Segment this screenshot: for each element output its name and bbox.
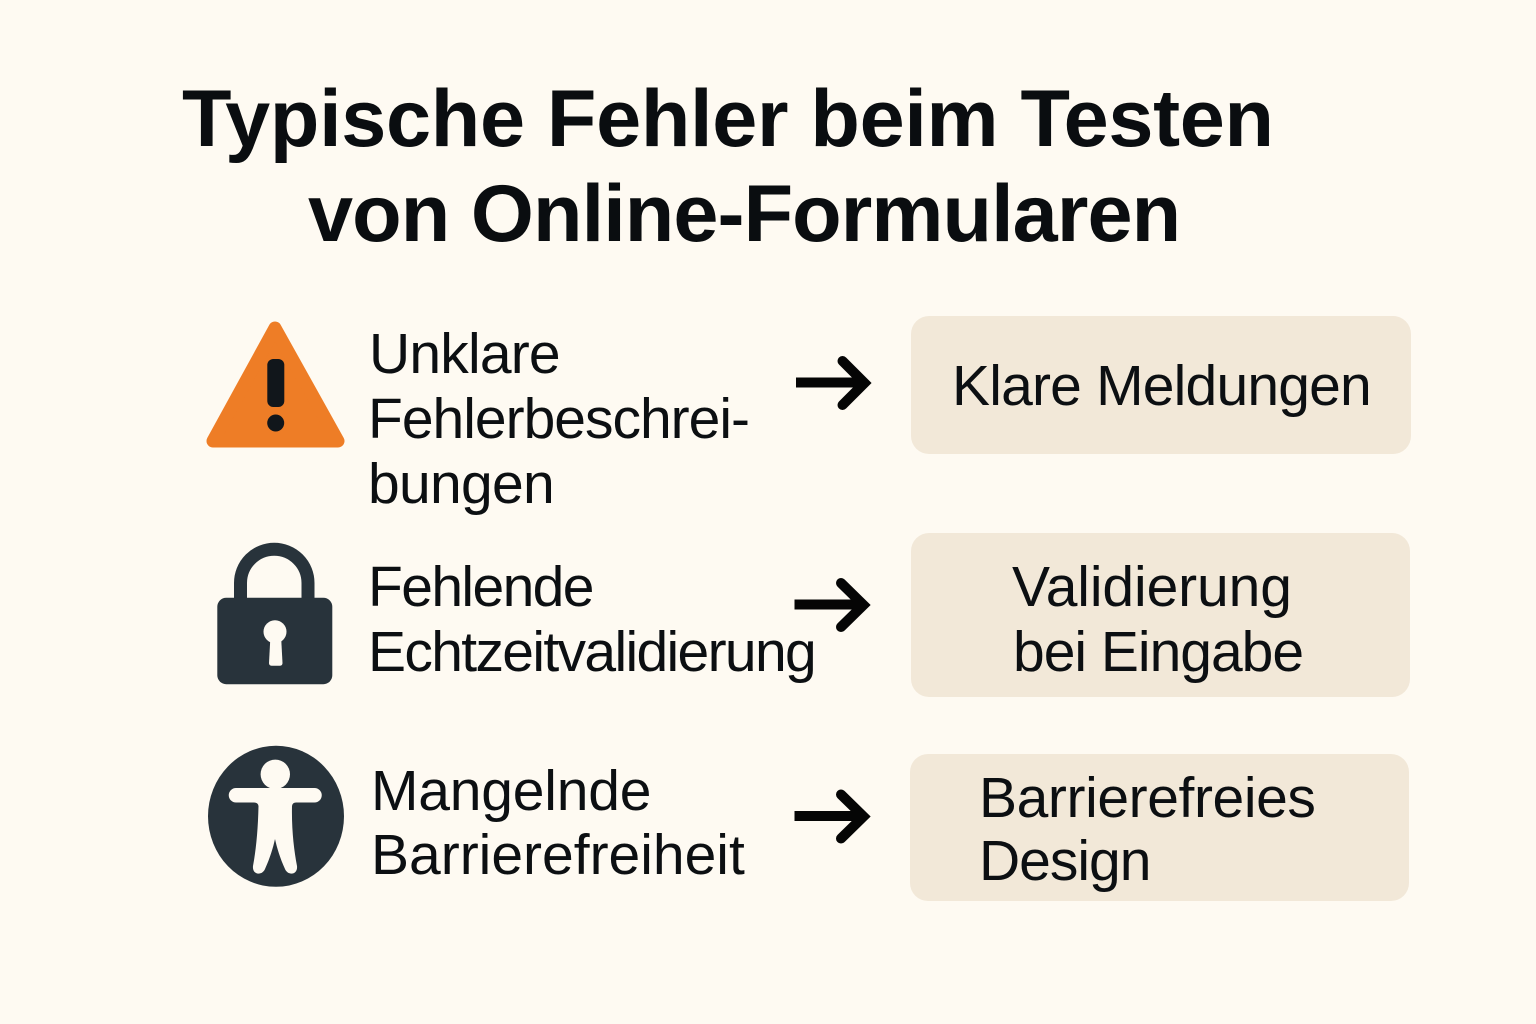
text: Mangelnde Barrierefreiheit: Barrierefreiheit (371, 823, 745, 887)
box: Barrierefreies Design: Design (979, 829, 1150, 893)
title: von Online-Formularen (308, 169, 1180, 259)
arrow 1 (796, 356, 872, 410)
box: Barrierefreies Design (910, 754, 1409, 901)
box: Validierung bei Eingabe (911, 533, 1410, 697)
arrow 3 (794, 790, 871, 844)
icon: padlock (217, 542, 332, 684)
text: Unklare Fehlerbeschreibungen: Unklare (369, 322, 560, 386)
title: Typische Fehler beim Testen (182, 74, 1274, 164)
arrow 2 (794, 578, 871, 632)
icon: accessibility figure (208, 746, 344, 887)
box: Barrierefreies Design: Barrierefreies (979, 766, 1316, 830)
icon: warning triangle (206, 322, 344, 448)
text: Mangelnde Barrierefreiheit: Mangelnde (371, 759, 651, 823)
box: Klare Meldungen: Klare Meldungen (952, 354, 1371, 418)
text: Fehlende Echtzeitvalidierung: Fehlende (368, 555, 593, 619)
text: Unklare Fehlerbeschreibungen: Fehlerbeschrei- (368, 387, 749, 451)
text: Mangelnde Barrierefreiheit (371, 759, 745, 887)
box: Klare Meldungen (911, 316, 1411, 454)
title (182, 74, 1274, 259)
box: Validierung bei Eingabe: Validierung (1012, 555, 1292, 619)
text: Fehlende Echtzeitvalidierung (368, 555, 815, 684)
box: Validierung bei Eingabe: bei Eingabe (1013, 620, 1303, 684)
text: Unklare Fehlerbeschreibungen: bungen (368, 452, 554, 516)
text: Fehlende Echtzeitvalidierung: Echtzeitvalidierung (368, 620, 815, 684)
text: Unklare Fehlerbeschreibungen (368, 322, 749, 516)
